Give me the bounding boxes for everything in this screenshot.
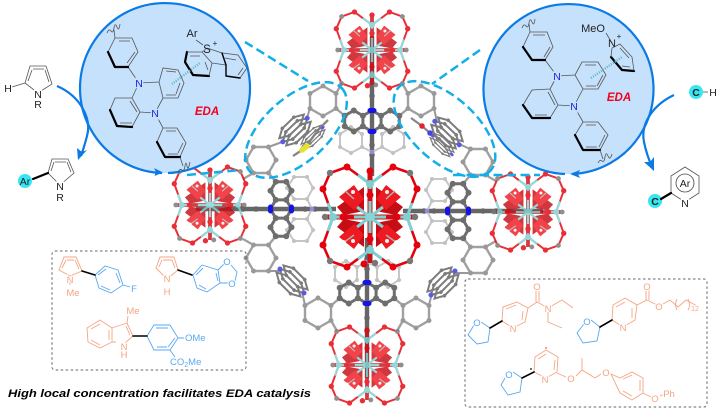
- cluster left: [174, 167, 246, 243]
- EDA interaction left: [172, 63, 200, 84]
- reactant right: C-H: H: [709, 87, 717, 99]
- linker right: [403, 149, 543, 273]
- molecule: N-methoxypyridinium acceptor: [581, 23, 634, 71]
- EDA interaction right: [591, 57, 622, 78]
- molecule: donor phenazine: N: [570, 101, 578, 113]
- cluster centre: [323, 167, 417, 267]
- arrowhead left circle: [154, 168, 163, 176]
- molecule: THF pyridine ether: O: [567, 374, 575, 385]
- molecule: NH pyrrole benzodioxole: O: [223, 257, 231, 268]
- molecule: THF nicotinamide: [468, 282, 573, 344]
- arrowhead right circle: [570, 170, 580, 178]
- molecule: methyl indole benzoate: CO: [170, 357, 184, 368]
- wavy attachment top: [107, 24, 120, 38]
- molecule: THF nicotinate ester: O: [655, 302, 663, 313]
- cluster top: [336, 12, 408, 88]
- product right: heteroarene: C: [651, 196, 659, 208]
- wavy attachment top: [522, 19, 535, 32]
- molecule: THF nicotinamide: O: [533, 282, 541, 293]
- molecule: NH pyrrole benzodioxole: O: [228, 279, 236, 290]
- molecule: THF nicotinate ester: [577, 282, 699, 343]
- highlight dashed ellipse right: [377, 64, 512, 194]
- molecule: NH pyrrole benzodioxole: [156, 257, 237, 298]
- molecule: THF nicotinate ester: O: [643, 282, 651, 293]
- molecule: donor phenazine: [107, 24, 190, 172]
- pi stack bottom left: [273, 262, 311, 300]
- molecule: methyl indole benzoate: Me: [126, 306, 140, 317]
- reactant right: C-H: [689, 85, 717, 99]
- molecule: donor phenazine: N: [151, 108, 159, 120]
- molecule: THF pyridine ether: O: [651, 394, 659, 405]
- pi stack bottom right: [424, 264, 462, 302]
- molecule: sulfonium acceptor: [185, 28, 247, 78]
- dashed zoom lines right: [432, 50, 540, 175]
- molecule: THF nicotinamide: N: [545, 304, 552, 315]
- reactant left: pyrrole: H: [4, 83, 12, 95]
- caption: High local concentration facilitates EDA catalysis: [8, 388, 311, 400]
- molecule: donor phenazine: N: [553, 71, 561, 83]
- molecule: methyl indole benzoate: [87, 306, 206, 369]
- molecule: THF pyridine ether: Ph: [663, 389, 675, 400]
- molecule: THF pyridine ether: O: [602, 368, 610, 379]
- reactant left: pyrrole: R: [34, 99, 42, 111]
- molecule: THF nicotinamide: N: [510, 324, 517, 335]
- pi stack top left: [276, 111, 328, 156]
- panel: product scope left: [52, 251, 246, 370]
- molecule: N-methyl fluorophenyl pyrrole: F: [131, 284, 137, 295]
- reactant left: pyrrole: [4, 66, 52, 111]
- cluster bottom: [331, 327, 403, 403]
- molecule: sulfonium acceptor: +: [213, 39, 218, 48]
- product left: arylated pyrrole: Ar: [20, 176, 31, 188]
- molecule: sulfonium acceptor: S: [203, 44, 211, 56]
- reactant right: C-H: C: [692, 87, 700, 99]
- molecule: methyl indole benzoate: Me: [188, 357, 201, 368]
- label EDA right: EDA: [607, 92, 631, 104]
- panel: central MOF structure: [174, 12, 564, 403]
- linker top: [310, 36, 434, 176]
- molecule: THF nicotinamide: O: [473, 318, 481, 329]
- product left: arylated pyrrole: N: [56, 181, 64, 193]
- panel: product scope right: [465, 279, 707, 407]
- product left: arylated pyrrole: R: [56, 192, 64, 204]
- product left: arylated pyrrole: [18, 159, 74, 204]
- molecule: N-methyl fluorophenyl pyrrole: Me: [66, 288, 80, 299]
- linker left: [196, 147, 336, 271]
- molecule: N-methyl fluorophenyl pyrrole: [59, 257, 137, 299]
- wavy attachment bottom: [598, 150, 612, 163]
- molecule: methyl indole benzoate: OMe: [185, 333, 206, 344]
- cluster right: [492, 174, 564, 250]
- product right: heteroarene: [648, 167, 699, 210]
- molecule: THF nicotinate ester: O: [583, 317, 591, 328]
- panel: right EDA circle: [483, 4, 654, 178]
- molecule: N-methoxypyridinium acceptor: N: [608, 38, 616, 50]
- molecule: donor phenazine: N: [135, 78, 143, 90]
- molecule: THF pyridine ether: [501, 347, 675, 405]
- product right: heteroarene: N: [681, 198, 689, 210]
- molecule: THF pyridine ether: O: [505, 370, 513, 381]
- molecule: NH pyrrole benzodioxole: N: [164, 274, 171, 285]
- linker bottom: [305, 238, 429, 378]
- molecule: N-methyl fluorophenyl pyrrole: N: [67, 275, 74, 286]
- molecule: NH pyrrole benzodioxole: H: [164, 287, 171, 298]
- label EDA left: EDA: [195, 106, 219, 118]
- molecule: THF nicotinate ester: 12: [691, 306, 699, 313]
- molecule: methyl indole benzoate: N: [121, 342, 128, 353]
- panel: left EDA circle: [80, 3, 250, 176]
- wavy attachment bottom: [178, 157, 190, 172]
- molecule: THF nicotinate ester: N: [620, 323, 627, 334]
- molecule: N-methoxypyridinium acceptor: +: [617, 32, 622, 41]
- arrow right: C-H to product: [643, 95, 674, 171]
- highlight dashed ellipse left: [229, 65, 363, 195]
- reactant left: pyrrole: N: [34, 89, 42, 101]
- dashed zoom lines left: [187, 42, 308, 175]
- molecule: methyl indole benzoate: 2: [184, 362, 188, 369]
- molecule: methyl indole benzoate: H: [121, 350, 128, 361]
- molecule: N-methoxypyridinium acceptor: MeO: [581, 23, 605, 35]
- pi stack top right: [411, 114, 466, 159]
- molecule: donor phenazine: [522, 19, 612, 163]
- molecule: THF pyridine ether: N: [542, 375, 549, 386]
- arrow left: pyrrole to product: [57, 86, 88, 160]
- molecule: sulfonium acceptor: Ar: [186, 28, 198, 40]
- product right: heteroarene: Ar: [680, 178, 691, 190]
